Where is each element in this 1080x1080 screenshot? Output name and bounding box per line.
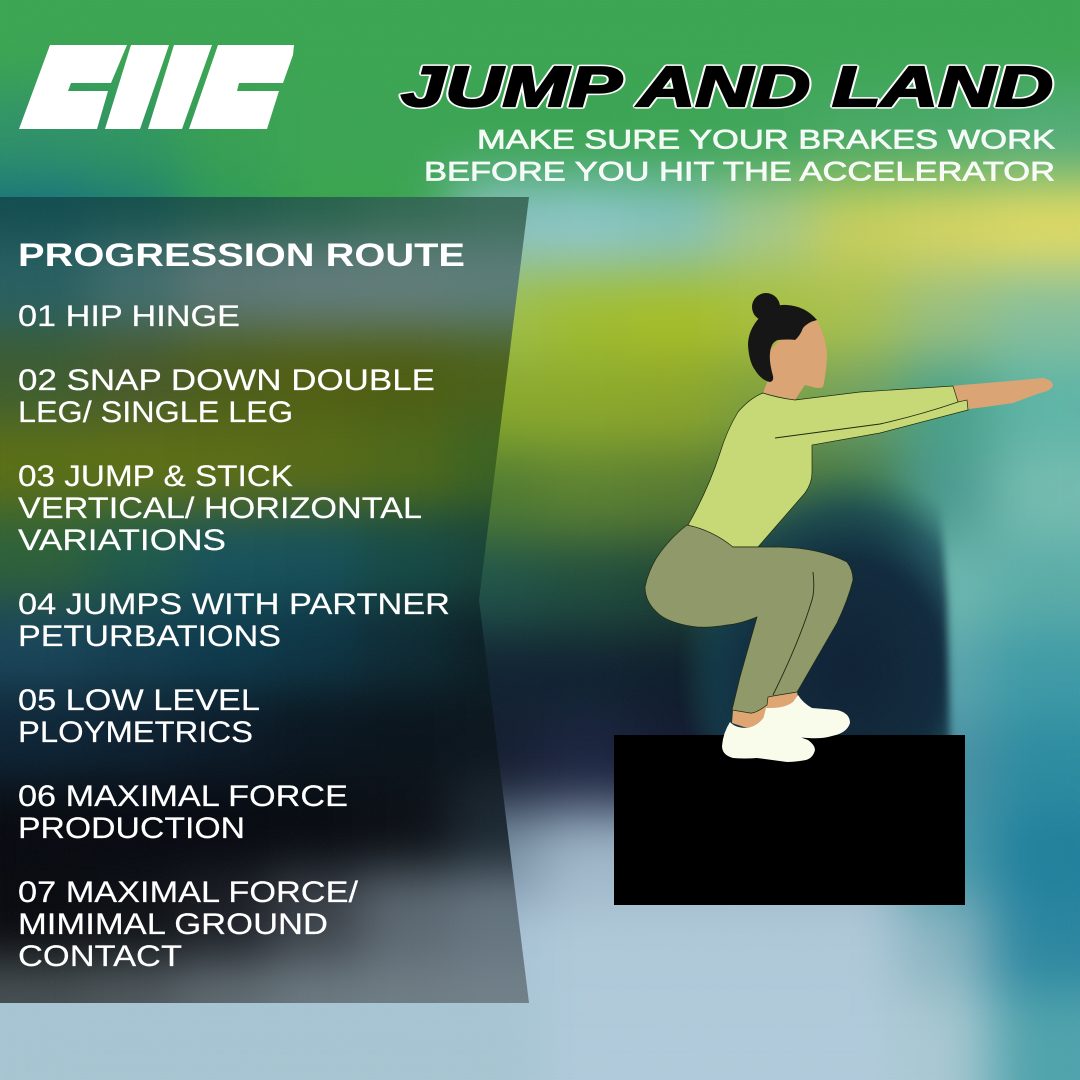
progression list: VARIATIONS [18,524,226,557]
progression list [18,300,450,973]
knee line [773,572,814,695]
progression list: LEG/ SINGLE LEG [18,396,293,429]
hair [748,293,817,382]
progression list: 04 JUMPS WITH PARTNER [18,588,450,621]
title: JUMP AND LAND [401,55,1053,119]
subtitle: BEFORE YOU HIT THE ACCELERATOR [424,156,1055,186]
progression list: 06 MAXIMAL FORCE [18,780,348,813]
progression list: PLOYMETRICS [18,716,253,749]
progression list: 05 LOW LEVEL [18,684,260,717]
front shoe [722,717,815,762]
progression list: CONTACT [18,940,182,973]
subtitle [424,124,1055,186]
progression list: VERTICAL/ HORIZONTAL [18,492,422,525]
back ankle [760,690,798,714]
plyo box [614,735,965,905]
progression list: 07 MAXIMAL FORCE/ [18,876,359,909]
subtitle: MAKE SURE YOUR BRAKES WORK [477,124,1055,154]
progression list: PETURBATIONS [18,620,281,653]
sweater [688,386,968,547]
logo [19,45,294,129]
progression list: 02 SNAP DOWN DOUBLE [18,364,435,397]
neck and face [763,320,827,400]
leggings [645,525,853,713]
heading: progression route: PROGRESSION ROUTE [18,237,465,273]
hand [950,378,1053,410]
progression list: 01 HIP HINGE [18,300,240,333]
panel: progression route background [0,197,529,1003]
sleeve line [775,402,958,438]
front ankle [732,704,767,728]
back shoe [755,695,850,738]
progression list: 03 JUMP & STICK [18,460,293,493]
title: JUMP AND LAND [401,55,1053,119]
progression list: PRODUCTION [18,812,245,845]
progression list: MIMIMAL GROUND [18,908,328,941]
figure: woman squatting on box [645,293,1053,762]
